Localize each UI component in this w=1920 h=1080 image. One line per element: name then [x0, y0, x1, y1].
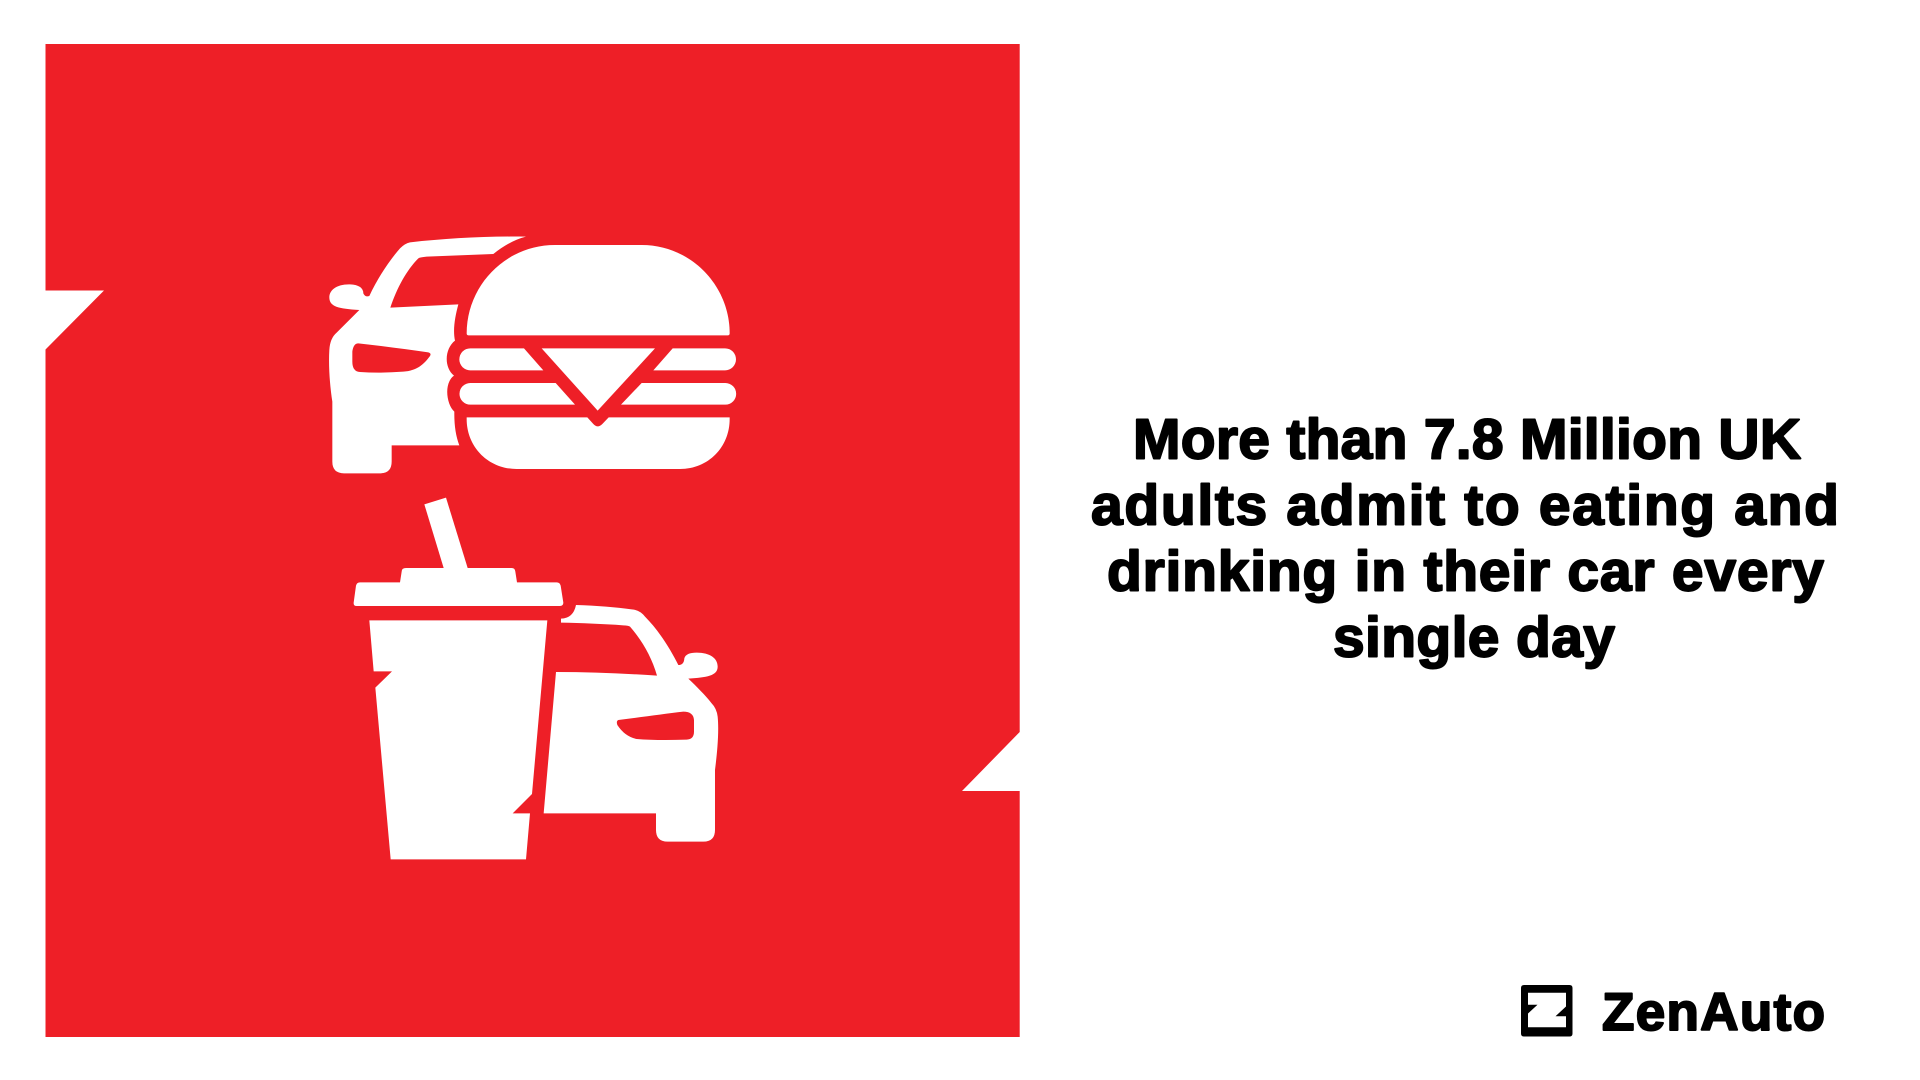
burger top bun: [467, 245, 730, 335]
headline line 1: More than 7.8 Million UK: [1133, 408, 1801, 472]
drink lid: [354, 568, 563, 606]
headline line 3: drinking in their car every: [1107, 540, 1824, 604]
burger right filling lower: [621, 383, 736, 405]
logo mark: [1521, 985, 1572, 1036]
icon: car front left: [329, 237, 526, 473]
icon: drink with car: [354, 498, 718, 859]
logo wordmark: ZenAuto: [1602, 983, 1825, 1042]
burger right filling upper: [653, 348, 736, 370]
burger bottom bun: [467, 417, 730, 469]
burger cheese triangle: [542, 348, 655, 411]
burger left filling lower: [459, 383, 575, 405]
icon: car with burger: [329, 237, 736, 473]
text block: headline statistic: [1091, 408, 1839, 670]
panel: red background with Z notches: [46, 44, 1020, 1037]
icon: burger: [459, 245, 736, 469]
icon: car front right: [544, 605, 718, 842]
drink straw: [424, 498, 468, 568]
burger left filling upper: [459, 348, 543, 370]
drink cup: [369, 620, 547, 859]
headline line 4: single day: [1333, 606, 1615, 670]
headline line 2: adults admit to eating and: [1091, 474, 1839, 538]
logo: ZenAuto: [1521, 983, 1825, 1042]
